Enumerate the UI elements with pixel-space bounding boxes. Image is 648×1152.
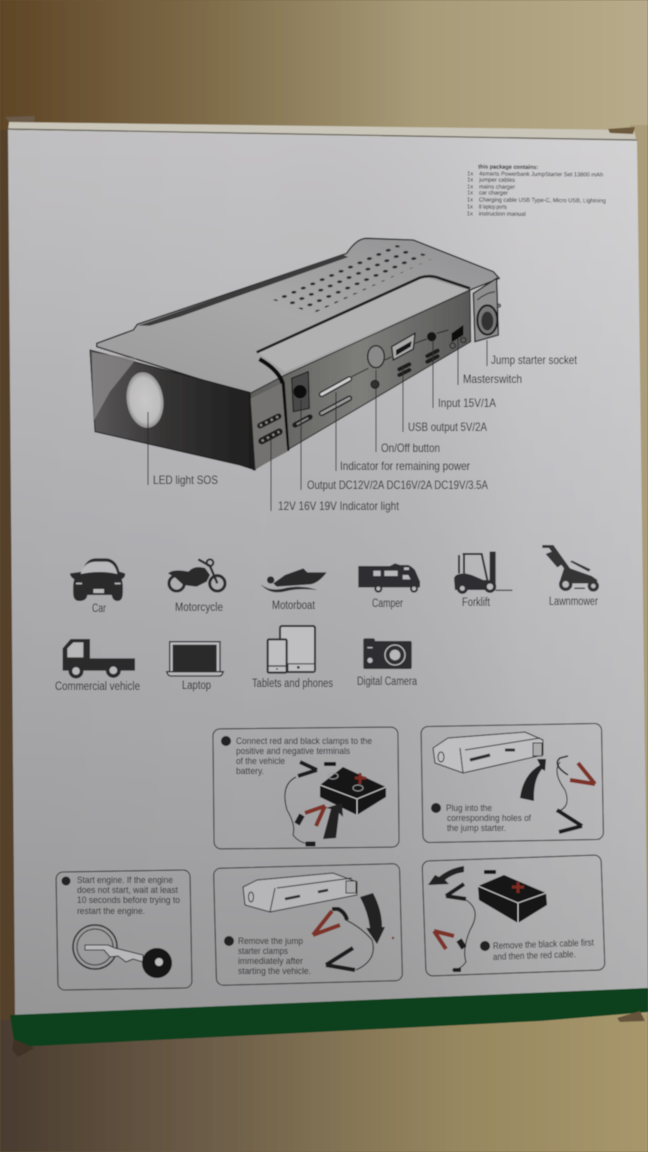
panel: step 1 — [213, 727, 399, 849]
step 5 battery — [478, 870, 547, 923]
package contents list: 1x — [467, 211, 473, 217]
step 1 text: Connect red and black clamps to the — [236, 736, 372, 747]
step 1 number — [221, 736, 231, 746]
step 4 red clamp — [313, 909, 347, 935]
box paper face — [8, 129, 648, 1016]
bottom tab left — [12, 1039, 34, 1057]
device photo: jump starter — [90, 238, 501, 470]
icon: lawnmower — [542, 545, 597, 590]
callout lines — [148, 338, 487, 511]
green box strip — [10, 988, 648, 1047]
icons: right group — [358, 545, 597, 669]
callout labels: Indicator for remaining power — [340, 459, 470, 473]
icon: commercial vehicle — [63, 639, 135, 677]
master switch — [450, 325, 466, 348]
bottom tab right — [617, 1011, 645, 1022]
step 3 text: does not start, wait at least — [77, 885, 178, 896]
package contents list: 1x — [467, 190, 473, 196]
device end highlight — [92, 352, 137, 422]
step 1 arrow — [323, 803, 343, 839]
callout labels: USB output 5V/2A — [408, 420, 487, 434]
step 2 red clamp — [556, 756, 595, 812]
device raised band shading — [257, 277, 468, 372]
icon labels: Lawnmower — [549, 596, 598, 608]
device corner band — [259, 359, 287, 451]
callout labels: On/Off button — [381, 441, 440, 455]
step 5 arrow — [428, 866, 464, 885]
step 4 text: Remove the jump — [238, 936, 303, 947]
step 2 arrow — [520, 759, 546, 801]
step 3 number — [62, 876, 70, 886]
step 1 text — [236, 736, 372, 777]
device front panel — [250, 290, 471, 470]
step 3 text: restart the engine. — [77, 906, 145, 917]
step 5 number — [480, 941, 490, 951]
package contents list: 1x — [467, 204, 473, 210]
USB port — [392, 333, 415, 375]
step 1 text: of the vehicle — [236, 756, 285, 767]
step 3 ignition and key — [73, 925, 172, 978]
step 2 number — [431, 803, 441, 813]
step 2 text: corresponding holes of — [447, 813, 531, 824]
background: right margin — [630, 125, 648, 1015]
device handle slot — [138, 254, 348, 326]
package contents list: 8 laptop ports — [479, 204, 507, 211]
line to on/off button — [352, 330, 448, 377]
icon: forklift — [454, 552, 512, 592]
background: table top — [0, 0, 648, 135]
package contents list: this package contains: — [478, 164, 538, 171]
callout labels: Input 15V/1A — [438, 396, 496, 410]
icon labels: Car — [92, 603, 106, 615]
step 4 device outline — [243, 873, 357, 912]
panel: step 5 — [422, 855, 605, 976]
step 2 text: the jump starter. — [447, 823, 506, 834]
step 1 text: positive and negative terminals — [236, 746, 350, 757]
step 4 text: starting the vehicle. — [238, 966, 311, 977]
step 3 text — [77, 875, 180, 917]
step 1 battery — [320, 762, 386, 815]
icon: laptop — [167, 642, 223, 676]
box flap tab right — [608, 127, 635, 134]
icons: left group — [63, 558, 327, 677]
icon: tablets and phones — [268, 626, 315, 673]
box top flap edge — [8, 122, 637, 143]
jump starter socket panel — [473, 278, 501, 342]
step 5 text: and then the red cable. — [493, 949, 576, 963]
step 5 text — [493, 937, 594, 963]
package contents list: 4smarts Powerbank JumpStarter Set 13800 mAh — [479, 171, 603, 179]
step 4 number — [224, 936, 234, 946]
device lens end face — [90, 350, 255, 470]
callout labels: 12V 16V 19V Indicator light — [278, 499, 400, 513]
step 2 text — [446, 803, 531, 834]
device left indicator panel — [251, 383, 287, 469]
step 3 text: Start engine. If the engine — [77, 875, 173, 886]
panel: step 4 — [214, 864, 403, 985]
step 4 text — [238, 936, 311, 977]
icon labels: Tablets and phones — [252, 678, 333, 690]
callout labels: Output DC12V/2A DC16V/2A DC19V/3.5A — [307, 478, 488, 492]
callout labels: Masterswitch — [463, 372, 522, 386]
package contents list: instruction manual — [479, 211, 526, 218]
power indicator slots — [322, 379, 349, 413]
icon: motorboat — [261, 568, 327, 592]
step 1 black clamp and cable — [285, 762, 317, 846]
step 4 black clamp and cable — [326, 920, 373, 970]
step 5 black clamp — [446, 884, 475, 972]
icon labels — [55, 596, 598, 693]
indicator lights — [260, 416, 279, 441]
background: left margin — [0, 130, 17, 1020]
step 4 text: immediately after — [238, 956, 303, 967]
icon labels: Laptop — [182, 680, 211, 692]
step 4 arrow — [360, 893, 385, 944]
package contents list: car charger — [479, 190, 508, 197]
icon: car — [70, 558, 125, 601]
device top face — [97, 238, 499, 395]
output DC socket — [292, 372, 310, 425]
package contents list: Charging cable USB Type-C, Micro USB, Lightning — [479, 197, 606, 205]
device top groove — [257, 276, 470, 352]
panel: step 3 — [56, 870, 192, 990]
icon labels: Forklift — [462, 597, 491, 609]
device speaker dots — [273, 244, 432, 312]
package contents list: mains charger — [479, 184, 515, 191]
box flap tab left — [5, 116, 35, 122]
callout labels: Jump starter socket — [491, 353, 578, 367]
icon labels: Commercial vehicle — [55, 681, 140, 693]
panel: step 2 — [421, 723, 603, 843]
callout labels: LED light SOS — [153, 473, 218, 487]
icon: motorcycle — [168, 559, 225, 591]
step 4 text: starter clamps — [238, 946, 288, 957]
input port — [427, 332, 438, 362]
device LED lens — [123, 370, 167, 430]
red speck — [392, 937, 394, 939]
icon labels: Motorcycle — [175, 602, 223, 614]
small button — [371, 380, 379, 388]
background: table bottom — [0, 1010, 648, 1152]
step 2 black clamp — [557, 810, 582, 832]
on/off button — [368, 346, 384, 368]
icon: camper — [358, 563, 420, 592]
step 5 text: Remove the black cable first — [493, 937, 594, 952]
icon: digital camera — [363, 638, 412, 669]
package contents list: 1x — [467, 177, 473, 183]
step 3 text: 10 seconds before trying to — [77, 895, 180, 906]
step 1 text: battery. — [236, 766, 264, 777]
step 2 device outline — [433, 732, 543, 773]
callout labels — [153, 353, 578, 513]
package contents list: jumper cables — [478, 177, 515, 184]
step 1 red clamp — [297, 806, 325, 826]
package contents list: 1x — [467, 171, 473, 177]
icon labels: Camper — [372, 598, 403, 610]
step 5 red clamp — [434, 931, 464, 949]
package contents list — [467, 164, 606, 219]
icon labels: Digital Camera — [357, 676, 417, 688]
step 2 text: Plug into the — [446, 803, 492, 814]
package contents list: 1x — [467, 184, 473, 190]
icon labels: Motorboat — [272, 600, 316, 612]
package contents list: 1x — [467, 197, 473, 203]
